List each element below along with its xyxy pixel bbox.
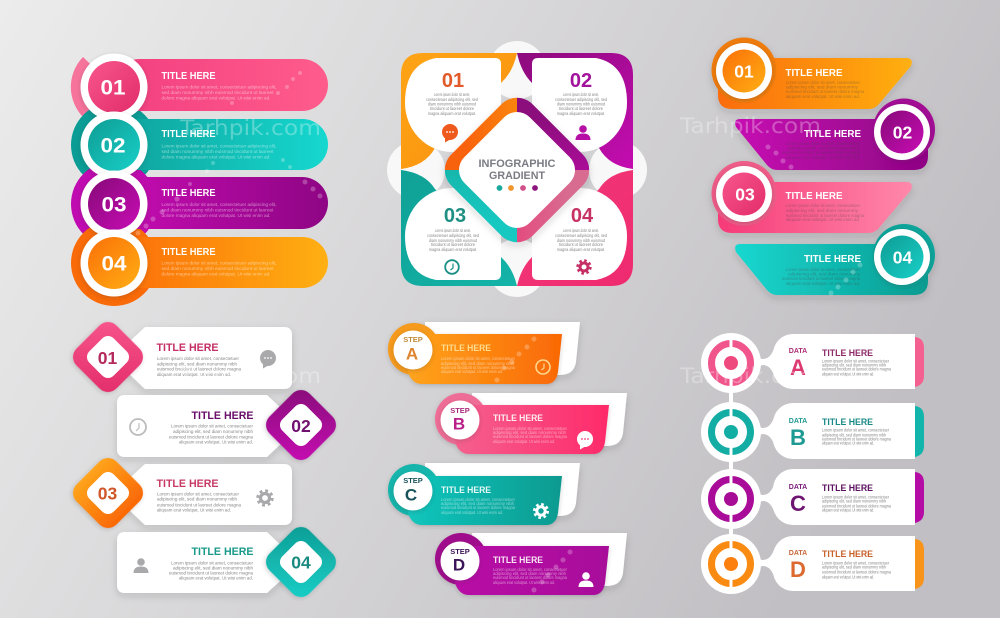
ribbon 01: 01	[734, 62, 754, 82]
badge 01: 01	[100, 76, 126, 100]
ribbon 03	[712, 161, 912, 233]
quadrant text 04	[555, 205, 607, 252]
data row A: TITLE HERE	[822, 348, 873, 359]
step C: C	[405, 486, 417, 504]
data row A: DATA	[789, 348, 807, 355]
data row C: euismod tincidunt ut laoreet dolore magna	[822, 504, 891, 508]
step D: aliquam erat volutpat. Ut wisi enim ad.	[493, 580, 555, 585]
step B: B	[453, 414, 465, 434]
quadrant text 04: diam nonummy nibh euismod	[557, 238, 605, 243]
data row A: A	[790, 355, 806, 380]
icon: chat orange	[442, 124, 458, 142]
data row B: B	[790, 425, 806, 450]
back rings	[71, 57, 157, 306]
ribbon 03: aliquam erat volutpat. Ut wisi enim ad.	[786, 217, 860, 222]
bar text 01: TITLE HERE	[162, 71, 216, 82]
ribbon 02: aliquam erat volutpat. Ut wisi enim ad.	[786, 155, 860, 160]
card 01: TITLE HERE	[156, 342, 218, 354]
bar text 03: Lorem ipsum dolor sit amet, consectetuer adipiscing elit,	[162, 202, 276, 207]
quadrant text 01: Lorem ipsum dolor sit amet,	[434, 92, 470, 97]
step C: aliquam erat volutpat. Ut wisi enim ad.	[441, 510, 503, 515]
bar text 01	[162, 71, 276, 100]
ribbon 03: euismod tincidunt ut laoreet dolore magna	[786, 213, 864, 218]
badge 03: 03	[102, 194, 126, 216]
data row A: Lorem ipsum dolor sit amet, consectetuer	[822, 358, 889, 364]
step D: euismod tincidunt ut laoreet dolore magna	[493, 575, 567, 580]
ribbon 03: Lorem ipsum dolor sit amet, consectetuer	[786, 203, 860, 208]
data row C: Lorem ipsum dolor sit amet, consectetuer	[822, 494, 889, 500]
card 04: euismod tincidunt ut laoreet dolore magna	[169, 570, 253, 576]
data row D: adipiscing elit, sed diam nonummy nibh	[822, 564, 886, 570]
data row A: aliquam erat volutpat. Ut wisi enim ad.	[822, 372, 874, 376]
data row C: TITLE HERE	[822, 483, 873, 494]
quadrant text 04: 04	[571, 205, 594, 227]
card 02	[117, 385, 341, 465]
decorative watermark: Tarhpik.com	[179, 364, 321, 388]
bar text 03	[162, 188, 276, 218]
step B	[435, 393, 627, 454]
panel: numbered rounded bars	[71, 54, 328, 306]
center title	[478, 158, 556, 182]
quadrant text 03: magna aliquam erat volutpat.	[429, 247, 477, 252]
card 01: 01	[98, 348, 117, 368]
step B: adipiscing elit, sed diam nonummy nibh	[493, 430, 566, 435]
step C: STEP	[403, 476, 423, 485]
data row A: adipiscing elit, sed diam nonummy nibh	[822, 362, 886, 368]
quadrant text 04: consectetuer adipiscing elit, sed	[555, 233, 607, 238]
card 02: Lorem ipsum dolor sit amet, consectetuer	[171, 424, 253, 428]
step A: TITLE HERE	[441, 343, 491, 354]
quadrant text 02: consectetuer adipiscing elit, sed	[555, 97, 607, 102]
ribbon 04: euismod tincidunt ut laoreet dolore magna	[782, 276, 860, 281]
data row C: C	[790, 491, 806, 516]
white card 04	[532, 188, 627, 280]
quadrant text 02: diam nonummy nibh euismod	[557, 102, 605, 106]
quadrant text 04: Lorem ipsum dolor sit amet,	[563, 228, 599, 233]
badge 01	[80, 54, 148, 120]
panel: data timeline	[701, 333, 924, 594]
step A	[388, 322, 580, 384]
step A: Lorem ipsum dolor sit amet, consectetuer	[441, 356, 515, 361]
step C: Lorem ipsum dolor sit amet, consectetuer	[441, 497, 515, 502]
quadrant text 03: tincidunt ut laoreet dolore	[431, 242, 475, 247]
quadrant text 02	[555, 70, 607, 116]
bar text 01: sed diam nonummy nibh euismod tincidunt ut laoreet	[162, 90, 274, 95]
icon: gear pink	[578, 261, 590, 273]
center diamond white	[452, 105, 582, 235]
white card 01	[405, 58, 501, 152]
data row B: aliquam erat volutpat. Ut wisi enim ad.	[822, 440, 874, 446]
card 04: adipiscing elit, sed diam nonummy nibh	[173, 566, 253, 570]
card 02: euismod tincidunt ut laoreet dolore magna	[169, 434, 253, 440]
bar text 04: TITLE HERE	[162, 247, 216, 258]
data row D: DATA	[789, 550, 807, 557]
icon: clock teal	[445, 260, 459, 274]
step A: aliquam erat volutpat. Ut wisi enim ad.	[441, 369, 503, 374]
card 03: aliquam erat volutpat. Ut wisi enim ad.	[157, 508, 231, 512]
ribbon 04: 04	[893, 248, 912, 268]
center diamond ring	[442, 98, 592, 248]
bar text 02: Lorem ipsum dolor sit amet, consectetuer adipiscing elit,	[162, 144, 276, 148]
quadrant text 01	[426, 70, 478, 116]
center title: GRADIENT	[489, 170, 545, 182]
quadrant text 01: consectetuer adipiscing elit, sed	[426, 97, 478, 102]
bar text 03: dolore magna aliquam erat volutpat. Ut wisi enim ad.	[162, 213, 270, 218]
ribbon 03: TITLE HERE	[786, 191, 843, 202]
ribbon 02: 02	[893, 122, 912, 142]
data row B: euismod tincidunt ut laoreet dolore magna	[822, 436, 891, 442]
white lobes	[387, 41, 647, 297]
data row B	[701, 402, 924, 462]
quadrant text 03	[427, 205, 479, 252]
quadrant: orange	[401, 53, 517, 169]
decorative particles	[136, 71, 862, 592]
card 03: adipiscing elit, sed diam nonummy nibh	[157, 496, 237, 502]
quadrant text 02: 02	[570, 70, 592, 92]
step B: STEP	[450, 406, 470, 415]
step A: adipiscing elit, sed diam nonummy nibh	[441, 361, 514, 366]
panel: diamond cards	[68, 317, 341, 602]
bar text 04: sed diam nonummy nibh euismod tincidunt ut laoreet	[162, 266, 274, 271]
step D: Lorem ipsum dolor sit amet, consectetuer	[493, 567, 567, 572]
data row B: adipiscing elit, sed diam nonummy nibh	[822, 432, 886, 438]
step B: TITLE HERE	[493, 413, 543, 424]
quadrant text 01: tincidunt ut laoreet dolore	[430, 106, 474, 111]
quadrant text 01: diam nonummy nibh euismod	[428, 102, 476, 106]
step A: STEP	[403, 335, 423, 344]
card 01: aliquam erat volutpat. Ut wisi enim ad.	[157, 372, 231, 377]
bar text 01: Lorem ipsum dolor sit amet, consectetuer adipiscing elit,	[162, 84, 276, 90]
white card 02	[532, 58, 627, 152]
quadrant text 02: magna aliquam erat volutpat.	[557, 111, 605, 116]
ribbon 02	[735, 98, 935, 170]
bar text 02: dolore magna aliquam erat volutpat. Ut wisi enim ad.	[162, 154, 270, 160]
timeline connector	[729, 363, 733, 564]
bar text 02	[162, 129, 276, 160]
bar text 03: TITLE HERE	[162, 188, 216, 199]
ribbon 04: TITLE HERE	[804, 254, 861, 265]
card 03	[68, 453, 292, 533]
quadrant text 02: Lorem ipsum dolor sit amet,	[563, 92, 599, 97]
step D: TITLE HERE	[493, 555, 543, 566]
ribbon 01: euismod tincidunt ut laoreet dolore magna	[786, 89, 864, 94]
data row D: aliquam erat volutpat. Ut wisi enim ad.	[822, 574, 874, 580]
card 03: Lorem ipsum dolor sit amet, consectetuer	[157, 492, 239, 496]
ribbon 02: Lorem ipsum dolor sit amet, consectetuer	[786, 141, 860, 146]
ribbon 04: aliquam erat volutpat. Ut wisi enim ad.	[786, 281, 860, 286]
card 04: Lorem ipsum dolor sit amet, consectetuer	[171, 560, 253, 566]
bar text 04: Lorem ipsum dolor sit amet, consectetuer adipiscing elit,	[162, 260, 276, 266]
bar text 04	[162, 247, 276, 276]
card 03: TITLE HERE	[156, 478, 218, 490]
ribbon 04: adipiscing elit, sed diam nonummy	[788, 272, 861, 276]
ribbon 03: adipiscing elit, sed diam nonummy	[786, 208, 859, 213]
bar text 03: sed diam nonummy nibh euismod tincidunt ut laoreet	[162, 208, 274, 212]
step D: D	[453, 556, 465, 574]
ribbon 02: TITLE HERE	[804, 129, 861, 140]
bars	[114, 59, 328, 288]
card 04	[117, 522, 341, 602]
panel: angled ribbons	[712, 38, 935, 295]
ribbon 01: adipiscing elit, sed diam nonummy	[786, 84, 859, 90]
ribbon 02: adipiscing elit, sed diam nonummy	[788, 146, 861, 150]
quadrant text 03: 03	[444, 205, 466, 227]
step A: euismod tincidunt ut laoreet dolore magna	[441, 365, 515, 370]
badge 02: 02	[100, 134, 126, 158]
decorative watermark: Tarhpik.com	[679, 364, 821, 388]
decorative watermark: Tarhpik.com	[679, 114, 821, 138]
data row D	[701, 534, 924, 594]
center title: INFOGRAPHIC	[478, 158, 556, 170]
badge 04: 04	[102, 252, 127, 276]
step C: adipiscing elit, sed diam nonummy nibh	[441, 501, 514, 506]
step C	[388, 463, 580, 525]
badge 04	[80, 230, 148, 296]
step B: euismod tincidunt ut laoreet dolore magna	[493, 434, 567, 439]
bar text 02: sed diam nonummy nibh euismod tincidunt ut laoreet	[162, 149, 274, 154]
ribbon 04: Lorem ipsum dolor sit amet, consectetuer	[786, 267, 860, 272]
card 04: aliquam erat volutpat. Ut wisi enim ad.	[179, 576, 253, 580]
card 02: 02	[291, 416, 311, 436]
ribbon 01: TITLE HERE	[786, 68, 843, 79]
step D	[435, 533, 627, 595]
data row C	[701, 469, 924, 529]
bar text 04: dolore magna aliquam erat volutpat. Ut wisi enim ad.	[162, 272, 270, 276]
ribbon 03: 03	[735, 184, 755, 204]
card 01: adipiscing elit, sed diam nonummy nibh	[157, 362, 237, 366]
ribbon 02: euismod tincidunt ut laoreet dolore magna	[782, 150, 860, 155]
quadrant text 03: consectetuer adipiscing elit, sed	[427, 233, 479, 238]
step A: A	[406, 344, 418, 364]
step D: STEP	[450, 547, 470, 556]
data row A	[701, 333, 924, 393]
step C: TITLE HERE	[441, 485, 491, 496]
card 01: euismod tincidunt ut laoreet dolore magna	[157, 366, 241, 372]
quadrant text 04: tincidunt ut laoreet dolore	[559, 242, 603, 247]
ribbon 01: aliquam erat volutpat. Ut wisi enim ad.	[786, 94, 860, 99]
decorative watermark: Tarhpik.com	[179, 116, 321, 140]
card 02: adipiscing elit, sed diam nonummy nibh	[173, 429, 253, 434]
card 03: euismod tincidunt ut laoreet dolore magna	[157, 502, 241, 508]
ribbon 04	[735, 224, 935, 295]
quadrant: pink	[517, 170, 633, 286]
card 04: 04	[291, 552, 311, 572]
card 04: TITLE HERE	[192, 546, 254, 558]
data row A: euismod tincidunt ut laoreet dolore magna	[822, 366, 891, 372]
data row D: TITLE HERE	[822, 549, 873, 560]
step B: Lorem ipsum dolor sit amet, consectetuer	[493, 426, 567, 431]
decorative watermark	[179, 114, 821, 388]
data row B: TITLE HERE	[822, 417, 873, 428]
badge 02	[80, 112, 148, 178]
card 02: TITLE HERE	[192, 410, 254, 422]
badge 03	[80, 170, 148, 238]
bar text 01: dolore magna aliquam erat volutpat. Ut wisi enim ad.	[162, 96, 270, 100]
card 02: aliquam erat volutpat. Ut wisi enim ad.	[179, 440, 253, 444]
quadrant text 03: diam nonummy nibh euismod	[429, 238, 477, 243]
card 03: 03	[98, 484, 117, 504]
data row D: euismod tincidunt ut laoreet dolore magna	[822, 570, 891, 574]
step B: aliquam erat volutpat. Ut wisi enim ad.	[493, 439, 555, 444]
data row C: DATA	[789, 484, 807, 491]
card 01: Lorem ipsum dolor sit amet, consectetuer	[157, 356, 239, 361]
data row D: D	[790, 557, 806, 582]
quadrant text 01: 01	[442, 70, 464, 92]
step C: euismod tincidunt ut laoreet dolore magna	[441, 505, 515, 510]
quadrant text 04: magna aliquam erat volutpat.	[557, 247, 605, 252]
panel: central four-quadrant diagram	[387, 41, 647, 297]
bar text 02: TITLE HERE	[162, 129, 216, 140]
white card 03	[405, 188, 501, 280]
data row D: Lorem ipsum dolor sit amet, consectetuer	[822, 560, 889, 566]
card 01	[68, 317, 292, 397]
data row C: adipiscing elit, sed diam nonummy nibh	[822, 498, 886, 504]
quadrant text 02: tincidunt ut laoreet dolore	[559, 106, 603, 111]
quadrant: teal	[401, 170, 517, 286]
step D: adipiscing elit, sed diam nonummy nibh	[493, 571, 566, 576]
quadrant text 03: Lorem ipsum dolor sit amet,	[435, 228, 471, 233]
ribbon 01: Lorem ipsum dolor sit amet, consectetuer	[786, 80, 860, 85]
quadrant text 01: magna aliquam erat volutpat.	[428, 111, 476, 116]
data row B: DATA	[789, 418, 807, 425]
data row B: Lorem ipsum dolor sit amet, consectetuer	[822, 428, 889, 432]
data row C: aliquam erat volutpat. Ut wisi enim ad.	[822, 508, 874, 512]
ribbon 01	[712, 38, 912, 109]
panel: step ribbons	[388, 322, 627, 595]
center dots	[497, 185, 538, 191]
quadrant: purple	[517, 53, 633, 169]
icon: person purple	[576, 125, 590, 140]
